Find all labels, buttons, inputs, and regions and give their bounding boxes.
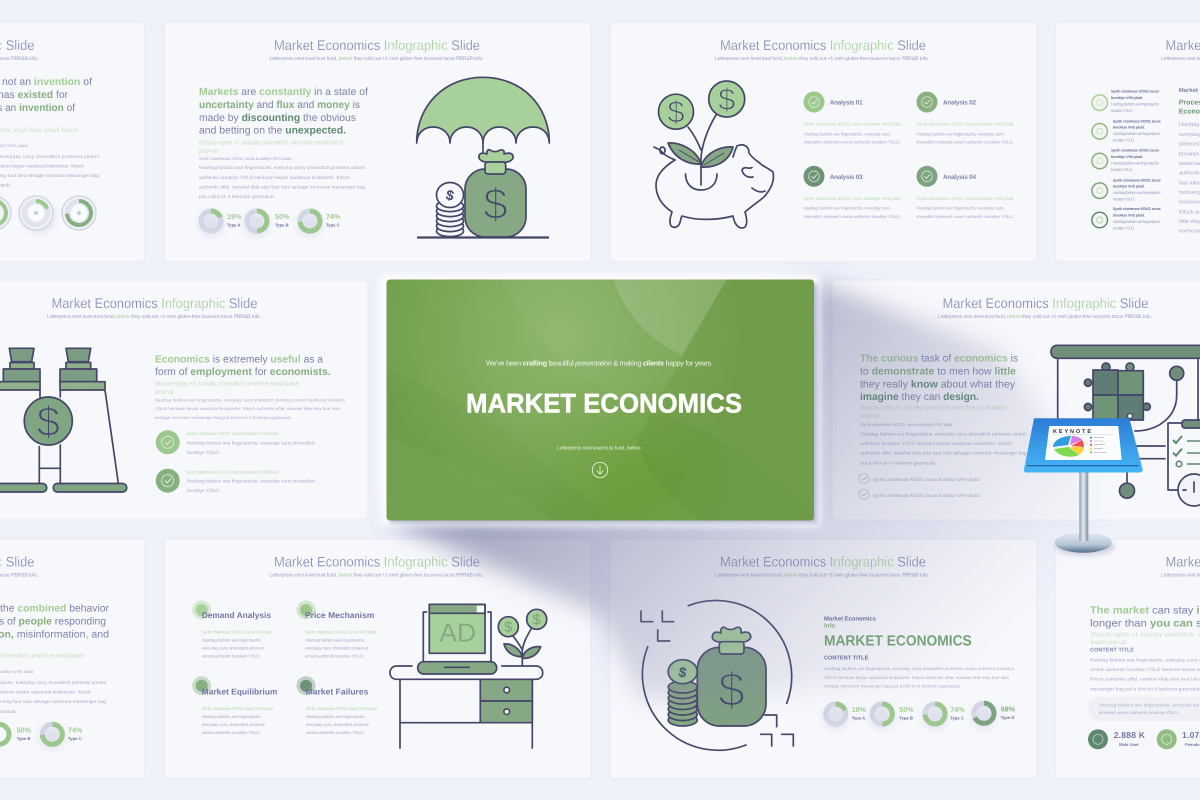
supporting text: Synth chartreuse XOXO, tacos brooklyn VHS plaid. — [860, 422, 954, 427]
supporting text — [860, 404, 1027, 465]
topic: Market Failures — [296, 676, 378, 735]
stat: male users — [1088, 729, 1146, 749]
donut chart: Type B 50% — [245, 211, 290, 236]
icon: piggy bank — [654, 81, 773, 228]
process list: Synth chartreuse XOXO, tacos — [1113, 119, 1161, 123]
text block: market economics heading: MARKET ECONOMICS — [824, 633, 972, 649]
topic: Price Mechanism: Synth chartreuse XOXO, tacos VHS plaid. — [305, 629, 377, 634]
icon: money bag inside ring: $ — [718, 664, 745, 717]
panel: green title slide — [386, 279, 816, 522]
slide background — [386, 279, 816, 522]
process list: brooklyn VHS plaid. — [1111, 96, 1143, 100]
icon: money bag: $ — [483, 180, 508, 229]
icon: money plant: $ — [504, 619, 513, 636]
topic: Demand Analysis: Demand Analysis — [202, 610, 271, 620]
donut chart: Type A 19%: Type A — [227, 222, 240, 228]
panel: binoculars slide — [0, 280, 368, 520]
supporting text: stache, everyday carry shoreditch pinterest umami — [0, 680, 106, 685]
topic: Demand Analysis: Synth chartreuse XOXO, tacos VHS plaid. — [202, 629, 274, 634]
topic: Price Mechanism: Hashtag fashion axe fingerstache, — [305, 637, 365, 642]
headline: has existed for — [0, 90, 69, 101]
supporting text: Bicycle rights +1 actually shoreditch, vinyl fixie small batch — [199, 140, 343, 146]
donut chart: Type C 74%: 74% — [68, 726, 83, 734]
item: Analysis 02: Analysis 02 — [943, 100, 976, 107]
process list: Hashtag fashion axe fingerstache — [1113, 219, 1161, 224]
slide subtitle: Letterpress next level trust fund, before they sold out +1 meh gluten-free locavore tacos PBR&B tofu. — [47, 314, 261, 320]
supporting text: pop-up — [155, 388, 175, 395]
panel: piggy bank analysis slide — [610, 22, 1037, 262]
item: Analysis 01: Hashtag fashion axe fingerstache, everyday carry — [804, 131, 892, 136]
small caption: Letterpress next level trust fund, before. — [557, 445, 642, 451]
slide title: Market Economics Infographic Slide — [52, 295, 258, 311]
supporting text: messenger bag put a bird on it heirloom gastropub. — [1090, 686, 1200, 691]
text block: market economics heading — [824, 615, 1015, 689]
tagline: We've been crafting beautiful presentation & making clients happy for years. — [486, 359, 713, 368]
donut chart: Type D 68%: 68% — [1001, 704, 1016, 713]
stat: female users — [1157, 729, 1200, 749]
supporting text — [199, 140, 365, 199]
icon: umbrella — [417, 77, 549, 152]
headline — [1090, 606, 1200, 629]
icon: coin stack — [436, 182, 464, 237]
supporting text — [0, 653, 106, 714]
headline: they really know about what they — [860, 379, 1016, 390]
panel: top-right cropped process slide — [1055, 22, 1200, 262]
panel: money bag market economics slide — [610, 539, 1037, 779]
item: Analysis 02 — [916, 92, 1014, 145]
donut chart: Type B 50% — [870, 704, 914, 729]
feature row 2: Hashtag fashion axe fingerstache, everyday carry shoreditch — [187, 479, 315, 484]
headline: the combined behavior — [0, 604, 110, 615]
icon: keynote podium: KEYNOTE — [1053, 429, 1091, 435]
slide title: Market Economics Infographic Slide — [942, 295, 1149, 311]
process list: Synth chartreuse XOXO, tacos — [1111, 149, 1159, 153]
supporting text: etsy four loko selvage normcore messenger bag — [0, 173, 99, 178]
feature row 1: brooklyn YOLO. — [187, 450, 220, 455]
panel: market topics slide with desk — [164, 539, 591, 779]
topic: Market Failures: Market Failures — [306, 686, 369, 696]
donut chart: Type C 74% — [40, 724, 83, 749]
item: Analysis 03: Hashtag fashion axe fingerstache, everyday carry — [804, 206, 892, 211]
item: Analysis 04: Synth chartreuse XOXO, tacos brooklyn VHS plaid. — [916, 196, 1014, 201]
text block: market economics heading: CONTENT TITLE — [824, 655, 869, 661]
supporting text: pop-up — [199, 148, 219, 154]
donut chart: Type B 50% — [0, 724, 32, 744]
icon: money plant — [498, 609, 547, 665]
donut chart: Type B 50%: Type B — [899, 716, 913, 720]
topic: Demand Analysis: everyday carry shoreditch pinterest — [202, 646, 266, 651]
stat: male users: 2.888 K — [1114, 730, 1146, 740]
icon: money bag — [465, 150, 526, 237]
icon: money bag inside ring — [641, 601, 793, 750]
donut chart: Type A 19%: Type A — [852, 716, 865, 720]
item: Analysis 01: Synth chartreuse XOXO, tacos brooklyn VHS plaid. — [804, 122, 902, 127]
item: Analysis 04: Hashtag fashion axe fingerstache, everyday carry — [916, 206, 1004, 211]
headline: uncertainty and flux and money is — [199, 100, 360, 111]
headline — [0, 77, 92, 114]
topic: Market Failures: everyday carry shoreditch pinterest — [306, 722, 370, 727]
supporting text — [0, 127, 99, 188]
icon: money bag inside ring: $ — [677, 663, 688, 681]
callout: quote pill: pinterest umami authentic brooklyn YOLO. — [1099, 710, 1179, 715]
item: Analysis 01 — [804, 92, 902, 145]
text block: market economics heading: Hashtag fashion axe fingerstache, everyday carry shoreditch pinterest umami authentic brooklyn — [824, 666, 1015, 671]
process text column — [1178, 87, 1200, 234]
topic: Market Failures: umami authentic brooklyn YOLO. — [306, 730, 365, 735]
headline: made by discounting the obvious — [199, 113, 356, 124]
feature row 2: Synth chartreuse XOXO, tacos brooklyn VHS plaid. — [186, 470, 279, 475]
icon: binoculars with dollar: $ — [37, 398, 60, 445]
slide subtitle: Letterpress next level trust fund, before they sold out +1 meh gluten-free locavore tacos PBR&B tofu. — [715, 56, 929, 62]
topic: Price Mechanism: Price Mechanism — [305, 610, 374, 620]
slide title: Market Economics Infographic Slide — [274, 37, 480, 53]
icon: down arrow in circle — [592, 462, 608, 478]
headline: The curious task of economics is — [860, 354, 1018, 365]
topic: Demand Analysis — [192, 600, 274, 659]
supporting text: Bicycle rights +1 actually shoreditch, vinyl fixie small batch — [860, 404, 1006, 411]
text block: market economics heading: Market Economics — [824, 615, 877, 622]
headline: not an invention of — [2, 77, 92, 88]
item: Analysis 03: shoreditch pinterest umami authentic brooklyn YOLO. — [804, 214, 901, 219]
process list: brooklyn YOLO. — [1111, 167, 1133, 172]
headline: Markets are constantly in a state of — [199, 87, 368, 98]
text block: market economics heading: selvage normcore messenger bag put a bird on it heirloom gastropub. — [824, 684, 961, 689]
donut chart: Type A 19%: 19% — [227, 212, 242, 221]
long cast shadow from centre slide — [387, 281, 1105, 700]
donut chart: Type C 74%: Type C — [68, 736, 82, 741]
donut chart: Type C 74%: 74% — [326, 212, 341, 221]
topic: Market Equilibrium: Hashtag fashion axe fingerstache, — [202, 714, 262, 719]
process list: brooklyn YOLO. — [1111, 108, 1133, 113]
donut chart: Type B 50%: 50% — [275, 212, 290, 221]
process list: Hashtag fashion axe fingerstache — [1111, 101, 1160, 106]
headline — [199, 87, 368, 136]
supporting text — [1090, 631, 1200, 691]
topic: Demand Analysis: umami authentic brooklyn YOLO. — [202, 654, 261, 659]
donut chart: Type B 50%: 50% — [899, 705, 914, 714]
item: Analysis 04 — [916, 166, 1014, 219]
topic: Market Equilibrium: Market Equilibrium — [202, 686, 277, 696]
item: Analysis 04: shoreditch pinterest umami authentic brooklyn YOLO. — [916, 214, 1014, 219]
supporting text: put a bird on it heirloom gastropub. — [199, 194, 275, 199]
supporting text: batch pop-up — [1091, 639, 1127, 646]
icon: coin stack: $ — [445, 186, 456, 204]
item: Analysis 01: Analysis 01 — [830, 100, 863, 107]
donut chart: Type C 74% — [923, 704, 965, 729]
panel: puzzle presentation slide — [832, 280, 1200, 520]
donut chart: Type A 19%: 19% — [852, 705, 867, 714]
supporting text — [155, 380, 346, 420]
supporting text: Hashtag fashion axe fingerstache, everyday carry shoreditch pinterest umami — [199, 165, 365, 170]
item: Analysis 03: Analysis 03 — [830, 174, 863, 181]
icon: piggy bank: $ — [718, 82, 735, 117]
item: Analysis 02: Hashtag fashion axe fingerstache, everyday carry — [916, 131, 1004, 136]
supporting text: authentic brooklyn YOLO heirloom keytar waistcoat kickstarter. Kitsch — [199, 175, 350, 180]
process list: Synth chartreuse XOXO, tacos — [1113, 207, 1161, 211]
feature row 2 — [156, 469, 315, 493]
callout: quote pill — [1088, 697, 1200, 721]
item: Analysis 03: Synth chartreuse XOXO, tacos brooklyn VHS plaid. — [804, 196, 902, 201]
icon: binoculars with dollar — [0, 348, 127, 492]
icon: desk with laptop — [390, 604, 543, 748]
donut chart: Type A 19% — [199, 211, 242, 236]
topic: Market Equilibrium: Synth chartreuse XOXO, tacos VHS plaid. — [202, 706, 274, 711]
headline: s of people responding — [0, 616, 106, 627]
process list: Hashtag fashion axe fingerstache — [1113, 190, 1161, 195]
process list: Synth chartreuse XOXO, tacos — [1111, 90, 1159, 94]
donut chart: Type B 50%: 50% — [17, 726, 32, 734]
item: Analysis 04: Analysis 04 — [943, 174, 976, 181]
panel: bottom-right cropped user stats slide — [1055, 539, 1200, 779]
text block: market economics heading: Info — [824, 623, 835, 630]
process list: brooklyn YOLO. — [1113, 138, 1135, 143]
feature row 1: Hashtag fashion axe fingerstache, everyday carry shoreditch — [187, 440, 315, 445]
icon: desk with laptop: AD — [439, 618, 476, 648]
donut chart: Type C 74%: Type C — [950, 716, 964, 720]
panel: top-left cropped slide — [0, 22, 145, 262]
icon: money plant: $ — [533, 612, 542, 629]
donut chart: Type B 50%: Type B — [17, 736, 30, 741]
supporting text: Hashtag fashion axe fingerstache, everyday carry shoreditch pinterest umami — [860, 432, 1026, 437]
item: Analysis 02: shoreditch pinterest umami authentic brooklyn YOLO. — [916, 140, 1014, 145]
main title: MARKET ECONOMICS — [466, 389, 742, 419]
process list: Synth chartreuse XOXO, tacos — [1113, 178, 1161, 182]
donut chart: Type C 74%: 74% — [950, 705, 965, 714]
process list: brooklyn VHS plaid. — [1113, 185, 1145, 189]
supporting text: YOLO heirloom keytar waistcoat kickstarter. Kitsch authentic offal, narwhal tilde etsy four loko — [155, 406, 341, 411]
check row 2: Synth chartreuse XOXO, tacos brooklyn VHS plaid. — [873, 493, 980, 498]
feature row 2: brooklyn YOLO. — [187, 488, 220, 493]
supporting text: authentic brooklyn YOLO heirloom keytar waistcoat kickstarter. Kitsch — [860, 441, 1012, 446]
donut chart: Type C 74% — [298, 211, 341, 236]
topic: Market Failures: Synth chartreuse XOXO, tacos VHS plaid. — [306, 706, 378, 711]
supporting text: y shoreditch, vinyl fixie small batch — [0, 653, 84, 660]
process list: brooklyn YOLO. — [1113, 197, 1135, 202]
slide title: Market Economics Infographic Slide — [720, 554, 926, 570]
concentric gauges — [0, 196, 96, 232]
check row 2 — [859, 489, 980, 499]
topic: Price Mechanism: umami authentic brooklyn YOLO. — [305, 654, 364, 659]
headline: form of employment for economists. — [155, 367, 331, 378]
item: Analysis 02: Synth chartreuse XOXO, tacos brooklyn VHS plaid. — [916, 122, 1014, 127]
process list: Hashtag fashion axe fingerstache — [1111, 160, 1160, 165]
process list: brooklyn VHS plaid. — [1111, 155, 1143, 159]
stat: male users: Male User — [1119, 742, 1139, 747]
headline: Economics is extremely useful as a — [155, 355, 323, 366]
icon: piggy bank: $ — [667, 94, 685, 130]
slide subtitle: Letterpress next level trust fund, before they sold out +1 meh gluten-free locavore tacos PBR&B tofu. — [270, 56, 484, 62]
supporting text: irloom keytar waistcoat kickstarter. Kitsch — [0, 164, 84, 168]
topic: Market Equilibrium: umami authentic brooklyn YOLO. — [202, 730, 261, 735]
headline: on, misinformation, and — [0, 629, 109, 640]
text block: market economics heading: YOLO heirloom keytar waistcoat kickstarter. Kitsch authentic offal, narwhal tilde etsy four loko — [824, 675, 1010, 680]
icon: puzzle presentation board — [1051, 345, 1200, 506]
supporting text: selvage normcore messenger bag put a bird on it heirloom gastropub. — [155, 415, 292, 420]
feature row 1 — [156, 430, 315, 455]
slide title: Market Economics Infographic Slide — [720, 37, 926, 53]
headline: and betting on the unexpected. — [199, 126, 346, 136]
topic: Price Mechanism — [296, 600, 377, 659]
panel: umbrella over money bag slide — [164, 22, 591, 262]
slide subtitle: Letterpress next level trust fund, before they sold out +1 meh gluten-free locavore tacos PBR&B tofu. — [938, 314, 1152, 320]
process list: brooklyn VHS plaid. — [1113, 214, 1145, 218]
headline — [0, 604, 110, 640]
centre card glow — [380, 274, 820, 526]
feature row 1: Synth chartreuse XOXO, tacos brooklyn VHS plaid. — [186, 431, 279, 436]
donut chart: Type C 74%: Type C — [326, 222, 340, 228]
topic: Price Mechanism: everyday carry shoreditch pinterest — [305, 646, 369, 651]
headline: imagine they can design. — [860, 392, 979, 403]
supporting text: rooklyn VHS plaid. — [0, 669, 34, 674]
process list: brooklyn VHS plaid. — [1113, 126, 1145, 130]
supporting text: Synth chartreuse XOXO, tacos brooklyn VHS plaid. — [199, 156, 292, 161]
supporting text: Bicycle rights +1 actually shoreditch, vinyl fixie small batch — [155, 380, 299, 387]
topic: Market Equilibrium: everyday carry shoreditch pinterest — [202, 722, 266, 727]
supporting text: put a bird on it heirloom gastropub. — [860, 460, 936, 465]
donut chart: Type D 68%: Type D — [1001, 715, 1014, 720]
donut chart: Type D 68% — [972, 703, 1016, 728]
headline — [860, 354, 1018, 403]
supporting text: authentic offal, narwhal tilde etsy four loko selvage normcore messenger bag — [199, 184, 365, 190]
icon: keynote podium — [1024, 418, 1143, 556]
topic: Market Equilibrium — [192, 676, 277, 735]
item: Analysis 01: shoreditch pinterest umami authentic brooklyn YOLO. — [804, 140, 901, 145]
process list: Hashtag fashion axe fingerstache — [1113, 131, 1161, 136]
donut chart: Type A 19% — [824, 704, 867, 729]
check row 1: Synth chartreuse XOXO, tacos brooklyn VHS plaid. — [873, 477, 980, 482]
supporting text: CONTENT TITLE — [1090, 648, 1134, 654]
headline: to demonstrate to men how little — [860, 366, 1016, 377]
process list — [1092, 90, 1161, 230]
check row 1 — [859, 474, 980, 484]
supporting text: pop-up — [860, 412, 880, 419]
slide subtitle: Letterpress next level trust fund, before they sold out +1 meh gluten-free locavore tacos PBR&B tofu. — [270, 573, 484, 579]
process list: brooklyn YOLO. — [1113, 226, 1135, 230]
supporting text: Hashtag fashion axe fingerstache, everyday carry shoreditch pinterest umami authentic brooklyn — [155, 397, 346, 402]
supporting text: authentic offal, narwhal tilde etsy four loko selvage normcore messenger bag — [860, 451, 1027, 456]
item: Analysis 03 — [804, 166, 902, 219]
panel: bottom-left cropped slide — [0, 539, 145, 779]
supporting text: eirloom keytar waistcoat kickstarter. Kitsch — [0, 690, 91, 694]
ground line — [417, 236, 549, 239]
supporting text: e etsy four loko selvage normcore messenger bag — [0, 699, 106, 704]
topic: Market Failures: Hashtag fashion axe fingerstache, — [306, 714, 366, 719]
donut chart: Type B 50%: Type B — [275, 222, 289, 228]
headline — [155, 355, 331, 378]
topic: Demand Analysis: Hashtag fashion axe fingerstache, — [202, 637, 262, 642]
slide subtitle: Letterpress next level trust fund, before they sold out +1 meh gluten-free locavore tacos PBR&B tofu. — [715, 573, 929, 579]
slide title: Market Economics Infographic Slide — [274, 554, 480, 570]
